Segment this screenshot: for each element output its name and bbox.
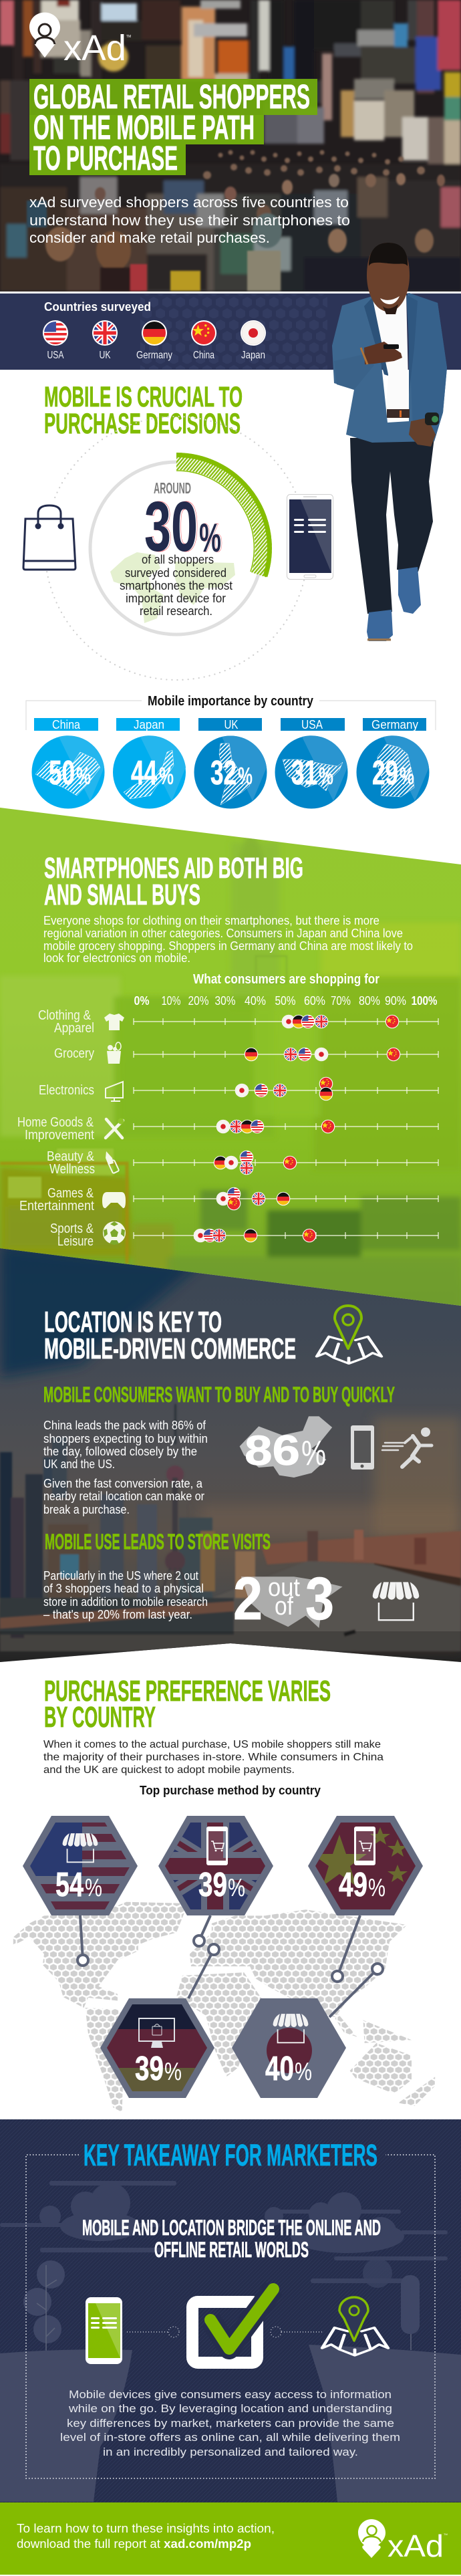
text block: smartphones aid — [43, 914, 413, 965]
number: 30 percent: 30 — [144, 487, 198, 566]
row: sports and leisure: Sports & — [50, 1221, 94, 1236]
text block: particularly in the US — [43, 1569, 208, 1621]
hexagon: Germany 39 percent: 39 — [135, 2049, 164, 2087]
text block: mobile devices: Mobile devices give consumers easy access to information — [69, 2388, 392, 2401]
heading: mobile is crucial: MOBILE IS CRUCIAL TO — [44, 381, 243, 413]
country card: China: 50 — [49, 753, 75, 792]
heading: top purchase method: Top purchase method by country — [140, 1784, 321, 1797]
row: electronics: Electronics — [39, 1083, 94, 1098]
city bank right — [261, 1531, 461, 1578]
intro text block — [29, 194, 350, 246]
row: clothing and apparel: Clothing & — [38, 1008, 92, 1023]
text: 30 percent caption: surveyed considered — [125, 566, 226, 580]
text: 30 percent caption: of all shoppers — [142, 553, 214, 566]
heading: location is key — [44, 1306, 296, 1365]
text block: china leads: China leads the pack with 86% of — [43, 1419, 206, 1432]
heading: mobile and location bridge — [82, 2216, 381, 2262]
row: home goods: Improvement — [25, 1128, 94, 1143]
text block: china leads: nearby retail location can make or — [43, 1490, 204, 1503]
footer text: download the full report at xad.com/mp2p — [17, 2537, 251, 2551]
flag: USA — [43, 320, 68, 361]
skyline left — [0, 1452, 12, 1633]
stat: 2 out of 3 with US map — [233, 1566, 343, 1633]
country card: Germany: % — [400, 762, 414, 790]
river — [0, 1561, 461, 1651]
text block: purchase preference: the majority of their purchases in-store. While consumers in China — [43, 1752, 383, 1763]
heading: location is key: LOCATION IS KEY TO — [44, 1306, 222, 1338]
row: games and entertainment: Games & — [47, 1186, 94, 1201]
connectors: map pins — [78, 1915, 383, 2017]
title: green highlighted heading: ON THE MOBILE PATH — [33, 108, 255, 146]
country card: UK: 32 — [210, 753, 237, 792]
stat: 2 out of 3 with US map: 2 — [233, 1566, 263, 1633]
ground hills — [0, 2349, 132, 2502]
hexagon: Japan 40 percent: % — [295, 2058, 312, 2086]
row: sports and leisure — [50, 1221, 316, 1249]
row: beauty and wellness: Wellness — [49, 1162, 95, 1177]
text block: china leads: shoppers expecting to buy within — [43, 1432, 208, 1445]
row: clothing and apparel — [38, 1008, 399, 1036]
row: sports and leisure: Leisure — [57, 1234, 94, 1249]
text block: mobile devices: level of in-store offers as online can, all while delivering them — [60, 2431, 400, 2444]
hexagon: China 49 percent: 49 — [339, 1865, 367, 1903]
heading: purchase preference: BY COUNTRY — [44, 1701, 156, 1734]
panel: countries surveyed — [0, 291, 461, 370]
axis labels: 70% — [331, 994, 351, 1008]
country card: Japan: Japan — [134, 718, 164, 731]
country card: China — [32, 718, 104, 809]
icon: running person — [382, 1427, 432, 1467]
panel: mobile importance by country — [26, 694, 436, 809]
axis labels: 10% — [162, 994, 180, 1008]
flag: China — [191, 320, 216, 361]
intro text block: understand how they use their smartphones to — [29, 212, 350, 229]
hexagon: Japan 40 percent: 40 — [265, 2049, 294, 2087]
shirt — [373, 294, 409, 409]
country card: UK: % — [238, 762, 253, 790]
number: 30 percent: 30 — [146, 487, 199, 566]
head — [367, 243, 410, 312]
icon: shopping bag — [23, 505, 75, 570]
text block: china leads — [43, 1419, 208, 1516]
title: green highlighted heading: TO PURCHASE — [33, 139, 178, 177]
heading: mobile is crucial: PURCHASE DECISIONS — [44, 408, 241, 440]
country card: Germany: 29 — [372, 753, 398, 792]
hero section: street photo background — [0, 0, 461, 291]
stat: 86 percent with china map: % — [301, 1434, 326, 1473]
icon: store — [373, 1582, 419, 1620]
connector: checkbox to map — [271, 2327, 323, 2337]
chart: what consumers are shopping for: What consumers are shopping for — [193, 972, 379, 987]
section background: location, city skyline photo — [0, 1244, 461, 1665]
hexagon: UK 39 percent: 39 — [198, 1865, 227, 1903]
forearm and hand — [334, 354, 374, 390]
stat: 86 percent with china map: 86 — [245, 1427, 300, 1474]
logo: xAd header: TM — [126, 35, 131, 39]
icon: smartphone — [287, 495, 333, 579]
stat: 2 out of 3 with US map: 3 — [305, 1566, 334, 1633]
flag: USA: USA — [47, 350, 64, 361]
flag: UK — [92, 320, 118, 361]
text block: particularly in the US: – that's up 20% from last year. — [43, 1608, 192, 1621]
heading: mobile is crucial — [44, 381, 243, 440]
figure: man with phone — [332, 243, 447, 641]
axis labels: 100% — [412, 994, 437, 1008]
heading: location is key: MOBILE-DRIVEN COMMERCE — [44, 1332, 296, 1365]
hexagon: UK 39 percent — [158, 1816, 273, 1915]
country card: China: China — [52, 718, 81, 731]
hexagon: USA 54 percent: 54 — [55, 1865, 84, 1903]
hexagon: UK 39 percent: % — [228, 1874, 245, 1902]
logo: xAd footer — [358, 2519, 448, 2563]
clouds left — [0, 2181, 176, 2252]
text: around: AROUND — [154, 479, 191, 497]
intro text block: consider and make retail purchases. — [29, 229, 270, 246]
country card: Germany: Germany — [371, 718, 418, 731]
hexagon: USA 54 percent — [23, 1816, 138, 1915]
row: grocery — [54, 1042, 400, 1064]
hexagon: China 49 percent — [308, 1816, 423, 1915]
country card: China: % — [76, 762, 91, 790]
text block: smartphones aid: mobile grocery shopping. Shoppers in Germany and China are most likely to — [43, 939, 413, 953]
row: home goods: Home Goods & — [17, 1115, 94, 1130]
flag: UK: UK — [99, 350, 111, 361]
country card: UK: UK — [224, 718, 238, 731]
section background: green London street photo — [0, 802, 461, 1310]
row: beauty and wellness: Beauty & — [47, 1149, 95, 1164]
clouds right — [265, 2192, 448, 2288]
logo: xAd footer: TM — [444, 2533, 448, 2536]
shoes — [367, 610, 393, 641]
icon: map with location pin — [317, 1306, 381, 1364]
text block: mobile devices: in an incredibly personalized and tailored way. — [103, 2446, 358, 2458]
footer text: To learn how to turn these insights into action, — [17, 2522, 275, 2535]
row: games and entertainment: Entertainment — [19, 1199, 94, 1213]
text block: particularly in the US: store in addition to mobile research — [43, 1595, 208, 1609]
chart: 30 percent donut — [20, 417, 333, 680]
hexagon: China 49 percent: % — [368, 1874, 386, 1902]
axis labels — [134, 994, 437, 1008]
heading: mobile and location bridge: OFFLINE RETAIL WORLDS — [154, 2238, 309, 2262]
country card: USA — [275, 718, 347, 809]
icon: map with pin green — [322, 2297, 388, 2355]
logo: xAd header: xAd — [63, 28, 126, 68]
number: 30 percent: % — [199, 515, 221, 560]
trees — [23, 2260, 420, 2343]
axis labels: 50% — [275, 994, 295, 1008]
text block: purchase preference — [43, 1739, 383, 1776]
dotted frame with heading: key takeaway — [26, 2138, 435, 2478]
row lines and ticks — [134, 1018, 438, 1239]
axis labels: 90% — [385, 994, 406, 1008]
row: clothing and apparel: Apparel — [54, 1021, 94, 1036]
flag: Japan — [241, 320, 266, 361]
hexagon: USA 54 percent: % — [85, 1874, 102, 1902]
text block: china leads: Given the fast conversion rate, a — [43, 1477, 203, 1490]
text block: china leads: UK and the US. — [43, 1457, 115, 1471]
text block: mobile devices: while on the go. By leveraging location and understanding — [68, 2402, 392, 2415]
connector: phone to checkbox — [127, 2327, 179, 2337]
panel: mobile importance by country: Mobile importance by country — [148, 694, 314, 709]
heading: purchase preference — [44, 1675, 331, 1734]
country card: Japan: % — [159, 762, 174, 790]
flag: China: China — [193, 350, 214, 361]
country card: Japan — [113, 718, 186, 809]
country card: UK — [194, 718, 267, 809]
axis labels: 30% — [215, 994, 235, 1008]
heading: countries surveyed: Countries surveyed — [44, 300, 151, 314]
country card: USA: USA — [301, 718, 323, 731]
row: home goods — [17, 1115, 335, 1143]
text block: china leads: the day, followed closely by the — [43, 1445, 197, 1458]
axis labels: 0% — [134, 994, 150, 1008]
flag: Japan: Japan — [241, 350, 265, 361]
jeans — [350, 438, 434, 614]
row: grocery: Grocery — [54, 1046, 94, 1061]
title: green highlighted heading — [29, 78, 317, 177]
axis labels: 60% — [304, 994, 325, 1008]
text block: smartphones aid: look for electronics on mobile. — [43, 951, 190, 965]
stat: 86 percent with china map — [240, 1416, 432, 1478]
text block: smartphones aid: Everyone shops for clothing on their smartphones, but there is more — [43, 914, 379, 927]
text: 30 percent caption — [120, 553, 233, 618]
footer text — [17, 2522, 275, 2551]
text: 30 percent caption: retail research. — [140, 604, 212, 618]
row: games and entertainment — [19, 1186, 290, 1213]
map: hexagon world map — [13, 1901, 436, 2111]
logo: xAd footer: xAd — [388, 2529, 444, 2563]
country card: Japan: 44 — [131, 753, 157, 792]
country card: USA: % — [319, 762, 333, 790]
icon: checkbox — [192, 2289, 274, 2363]
text block: purchase preference: and the UK are quickest to adopt mobile payments. — [43, 1764, 295, 1776]
panel: key takeaway background — [0, 2119, 461, 2502]
axis labels: 80% — [359, 994, 380, 1008]
text: 30 percent caption: important device for — [126, 592, 226, 605]
icon: green smartphone — [86, 2297, 122, 2364]
text: 30 percent caption: smartphones the most — [120, 579, 233, 592]
text block: particularly in the US: Particularly in the US where 2 out — [43, 1569, 198, 1583]
country card: Germany — [357, 718, 429, 809]
text block: china leads: break a purchase. — [43, 1503, 130, 1516]
hexagon: Germany 39 percent: % — [164, 2058, 182, 2086]
footer — [0, 2502, 461, 2575]
hexagon: Japan 40 percent — [232, 1998, 346, 2098]
row: beauty and wellness — [47, 1149, 297, 1177]
chart: what consumers are shopping for — [17, 972, 438, 1249]
blazer — [332, 293, 447, 443]
icon: phone — [351, 1425, 374, 1470]
row: electronics — [39, 1077, 333, 1101]
intro text block: xAd surveyed shoppers across five countries to — [29, 194, 349, 211]
heading: mobile use leads: MOBILE USE LEADS TO STORE VISITS — [45, 1530, 271, 1554]
stat: 2 out of 3 with US map: out — [268, 1574, 300, 1602]
country card: USA: 31 — [291, 753, 317, 792]
hand in pocket — [409, 418, 436, 447]
text block: smartphones aid: regional variation in other categories. Consumers in Japan and China love — [43, 927, 403, 940]
text block: purchase preference: When it comes to the actual purchase, US mobile shoppers still make — [43, 1739, 381, 1750]
text block: particularly in the US: of 3 shoppers head to a physical — [43, 1582, 204, 1595]
text block: mobile devices: key differences by market, marketers can provide the same — [67, 2417, 394, 2430]
heading: smartphones aid: AND SMALL BUYS — [44, 879, 200, 911]
flag: Germany: Germany — [136, 350, 172, 361]
hexagon: Germany 39 percent — [100, 1998, 214, 2098]
number: 30 percent: % — [200, 515, 222, 560]
axis labels: 20% — [188, 994, 208, 1008]
icon: monitor with bag — [139, 2018, 174, 2048]
world map watermark — [110, 552, 235, 623]
axis labels: 40% — [245, 994, 266, 1008]
text block: mobile devices — [60, 2388, 400, 2458]
flag: Germany — [136, 320, 172, 361]
logo: xAd header — [29, 13, 131, 68]
stat: 2 out of 3 with US map: of — [275, 1593, 293, 1621]
heading: smartphones aid — [44, 852, 303, 911]
oriental pearl tower — [174, 1404, 176, 1444]
